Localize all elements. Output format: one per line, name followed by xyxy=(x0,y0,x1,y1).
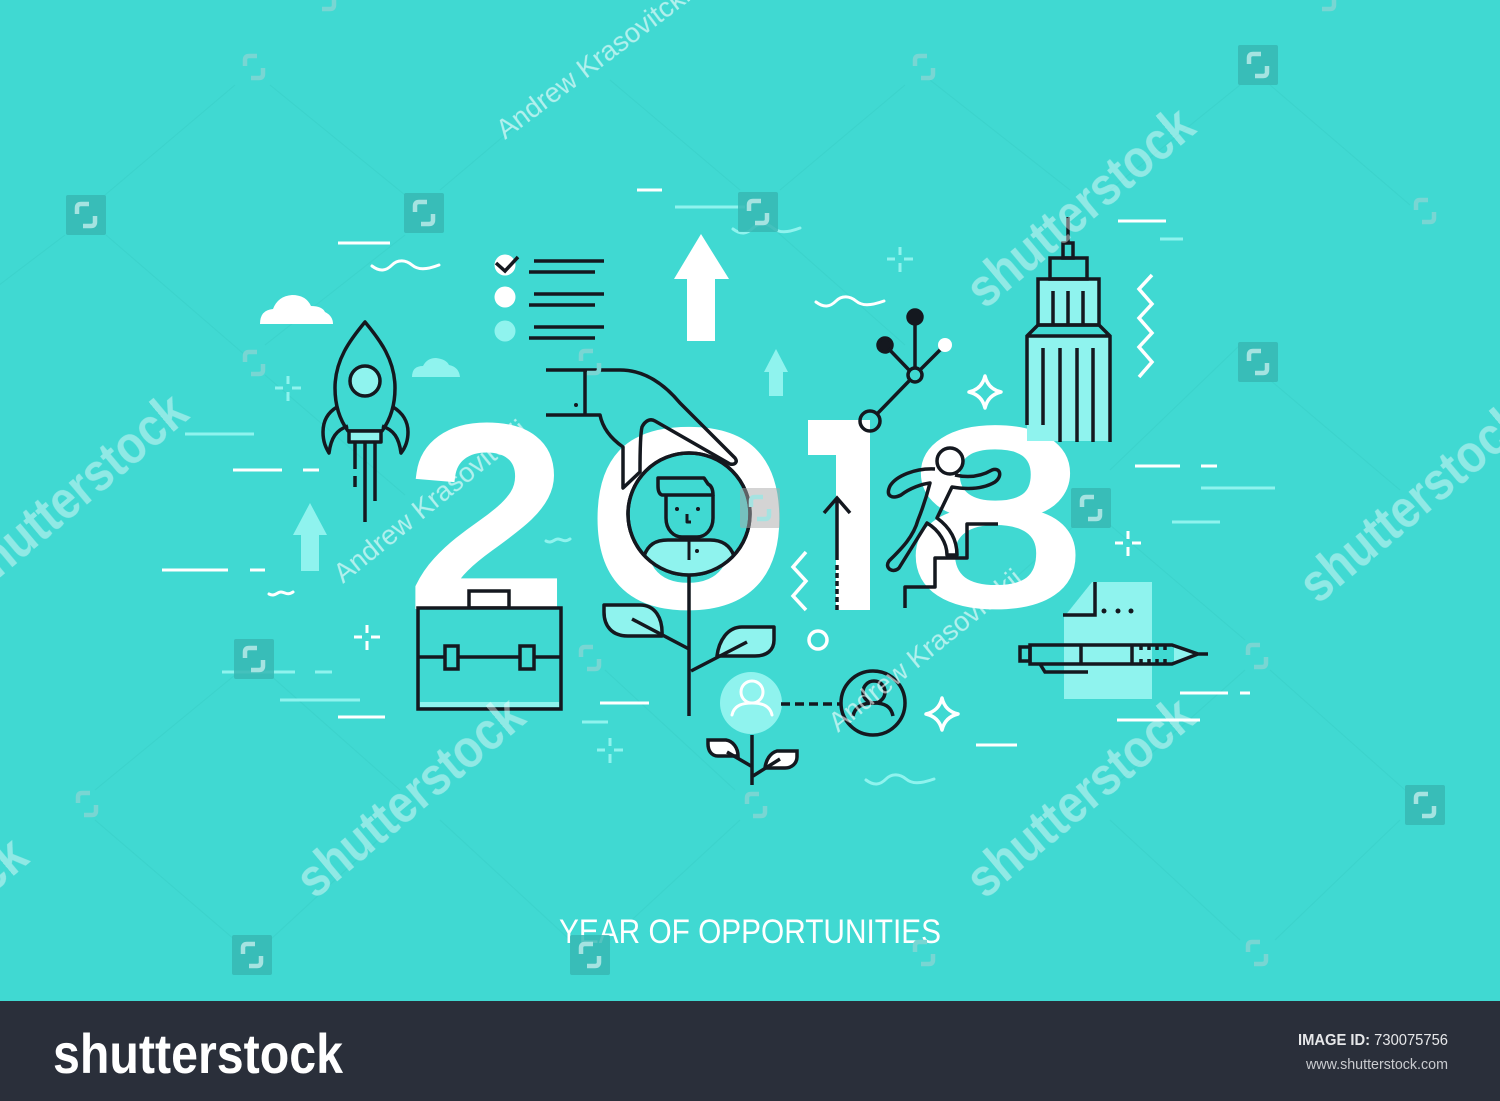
icon: growing person flower xyxy=(604,453,774,716)
watermark author name: Andrew Krasovitckii xyxy=(327,414,533,589)
icon: hand xyxy=(546,370,736,488)
icon: light arrow centre xyxy=(764,349,788,396)
watermark author name: Andrew Krasovitckii xyxy=(822,563,1028,738)
digit 0: 0 xyxy=(591,382,786,656)
icon: rocket xyxy=(323,322,408,522)
watermark shutterstock logos: shutterstock xyxy=(284,684,536,909)
icon: climbing figure xyxy=(888,448,1000,608)
icon: skyscraper xyxy=(1027,217,1110,442)
small ring xyxy=(809,631,827,649)
hand cuff dot xyxy=(574,403,578,407)
digits 2018 xyxy=(415,420,1076,610)
watermark shutterstock logos: shutterstock xyxy=(954,94,1206,319)
icon: checklist xyxy=(494,254,604,342)
footer logo: shutterstock xyxy=(53,1022,344,1085)
icon: cloud white xyxy=(260,295,333,324)
dashed connector xyxy=(781,702,841,706)
digit 1 xyxy=(808,420,870,610)
icon: mentee circle xyxy=(720,672,782,734)
watermark author name xyxy=(327,0,1028,738)
zigzag right xyxy=(1139,275,1152,377)
plus sparks xyxy=(275,247,1141,763)
digit 2: 2 xyxy=(408,378,564,657)
decorative dashes and waves xyxy=(162,190,1275,784)
sparkle stars xyxy=(926,376,1001,730)
footer image id: IMAGE ID: 730075756 xyxy=(1298,1032,1448,1049)
icon: growth arrow xyxy=(824,498,850,610)
footer url: www.shutterstock.com xyxy=(1305,1056,1448,1073)
icon: cloud light xyxy=(412,358,460,377)
icon: mentor circle xyxy=(841,671,905,735)
icon: white up arrow xyxy=(674,234,729,341)
watermark shutterstock logos: shutterstock xyxy=(954,684,1206,909)
digit 1: 1 xyxy=(713,370,981,669)
digit 8: 8 xyxy=(907,378,1084,656)
icon: light arrow left xyxy=(293,503,327,571)
icon: briefcase xyxy=(418,591,561,709)
caption: YEAR OF OPPORTUNITIES xyxy=(559,913,941,951)
footer bar xyxy=(0,1001,1500,1101)
icon: document and pen xyxy=(1020,582,1208,699)
icon: small plant xyxy=(708,735,797,785)
icon: network branch xyxy=(860,310,952,431)
zigzag left xyxy=(793,552,806,610)
